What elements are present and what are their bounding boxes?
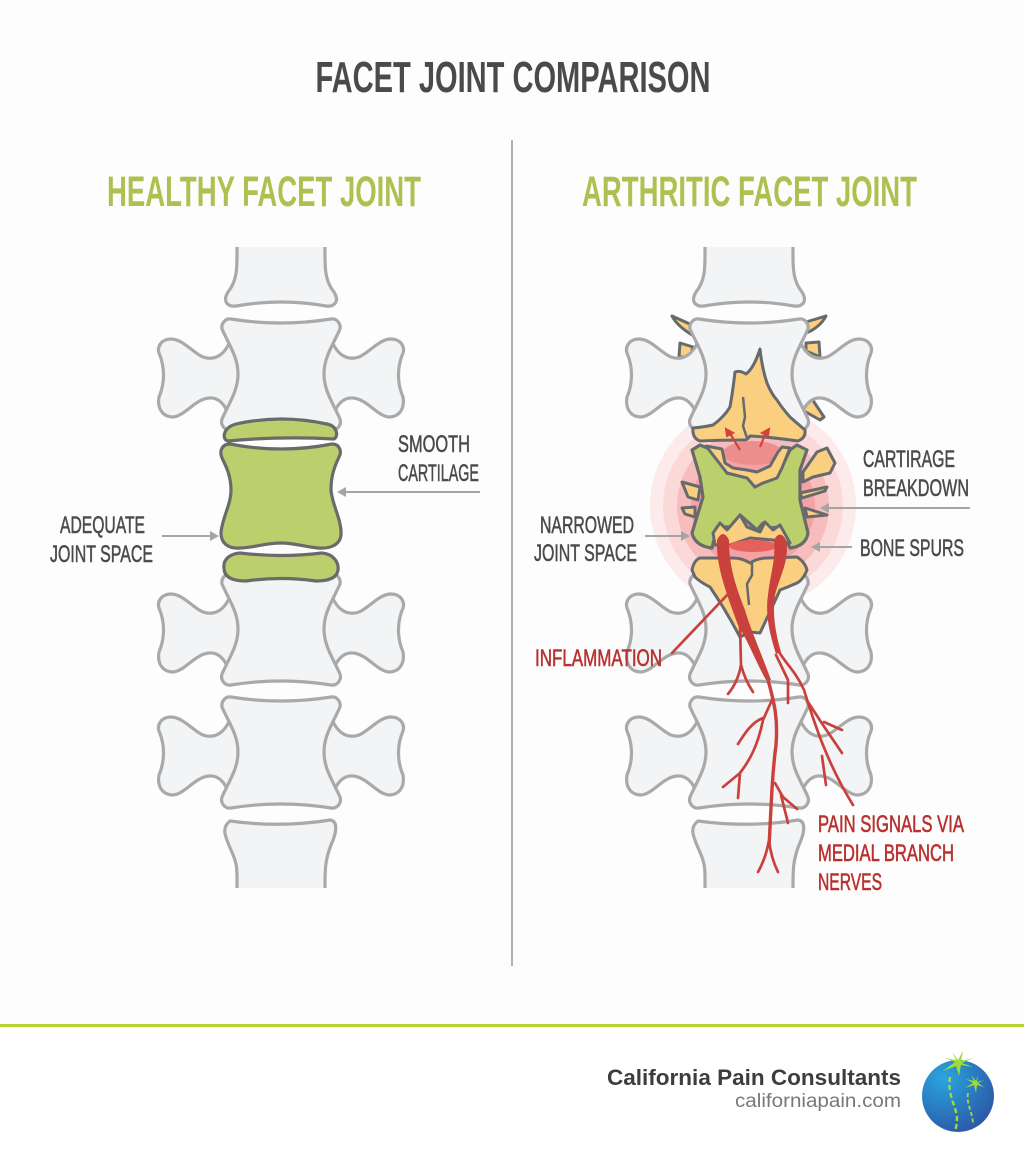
label: bone spurs: BONE SPURS <box>860 535 964 562</box>
bottom vertebra stub <box>693 820 804 888</box>
label: smooth cartilage <box>398 431 479 487</box>
bottom vertebra stub <box>225 820 336 888</box>
label: smooth cartilage: CARTILAGE <box>398 460 479 487</box>
white joint gap <box>231 438 331 446</box>
red arrows from upper bone <box>726 429 769 450</box>
arrow: bone spurs <box>811 542 852 552</box>
joint inflammation lower <box>729 540 777 552</box>
label: pain signals via medial branch nerves: NERVES <box>818 869 882 896</box>
label: pain signals via medial branch nerves: MEDIAL BRANCH <box>818 840 954 867</box>
side bone spurs <box>682 448 835 517</box>
upper cartilage <box>224 419 337 441</box>
upper vertebra <box>626 319 872 430</box>
label: inflammation: INFLAMMATION <box>535 645 662 672</box>
label: smooth cartilage: SMOOTH <box>398 431 470 458</box>
fissure in upper bone <box>743 397 747 438</box>
top vertebra stub <box>226 247 336 306</box>
eroded lower joint surface <box>713 515 790 545</box>
label: narrowed joint space <box>534 512 637 567</box>
footer accent line <box>0 1024 1024 1027</box>
lower cartilage <box>224 553 338 581</box>
label: pain signals via medial branch nerves <box>818 811 964 896</box>
central cartilage <box>221 444 341 548</box>
lower arthritic bone <box>692 557 807 637</box>
brand name: California Pain Consultants <box>607 1065 901 1090</box>
third vertebra <box>158 697 404 808</box>
arrow: smooth cartilage <box>337 487 480 497</box>
lower vertebra <box>158 574 404 685</box>
footer <box>0 1024 1024 1154</box>
fissure in lower bone <box>747 563 752 605</box>
label: cartilage breakdown <box>863 446 969 502</box>
icon: logo globe with palms <box>922 1051 994 1132</box>
arrow: adequate joint space <box>162 531 219 541</box>
upper vertebra <box>158 319 404 430</box>
joint inflammation upper <box>723 441 783 465</box>
label: cartilage breakdown: BREAKDOWN <box>863 475 969 502</box>
panel: healthy spine <box>158 247 404 888</box>
inflammation halo <box>650 403 856 609</box>
upper arthritic bone <box>693 349 805 441</box>
label: narrowed joint space: JOINT SPACE <box>534 540 637 567</box>
label: cartilage breakdown: CARTIRAGE <box>863 446 955 473</box>
third vertebra <box>626 697 872 808</box>
arthritic cartilage <box>692 445 808 548</box>
nerves <box>672 534 853 872</box>
label: adequate joint space: JOINT SPACE <box>50 541 153 568</box>
website: californiapain.com <box>735 1091 901 1112</box>
arrow: narrowed joint space <box>645 531 690 541</box>
top vertebra stub <box>694 247 804 306</box>
panel: arthritic spine <box>626 247 872 888</box>
upper bone spurs <box>672 316 826 420</box>
arrow: cartilage breakdown <box>820 503 970 513</box>
heading: healthy facet joint: HEALTHY FACET JOINT <box>107 168 421 216</box>
title: FACET JOINT COMPARISON <box>316 53 710 102</box>
eroded upper joint surface <box>706 446 790 487</box>
label: adequate joint space: ADEQUATE <box>60 512 145 539</box>
lower vertebra <box>626 574 872 685</box>
label: narrowed joint space: NARROWED <box>540 512 634 539</box>
label: adequate joint space <box>50 512 153 568</box>
